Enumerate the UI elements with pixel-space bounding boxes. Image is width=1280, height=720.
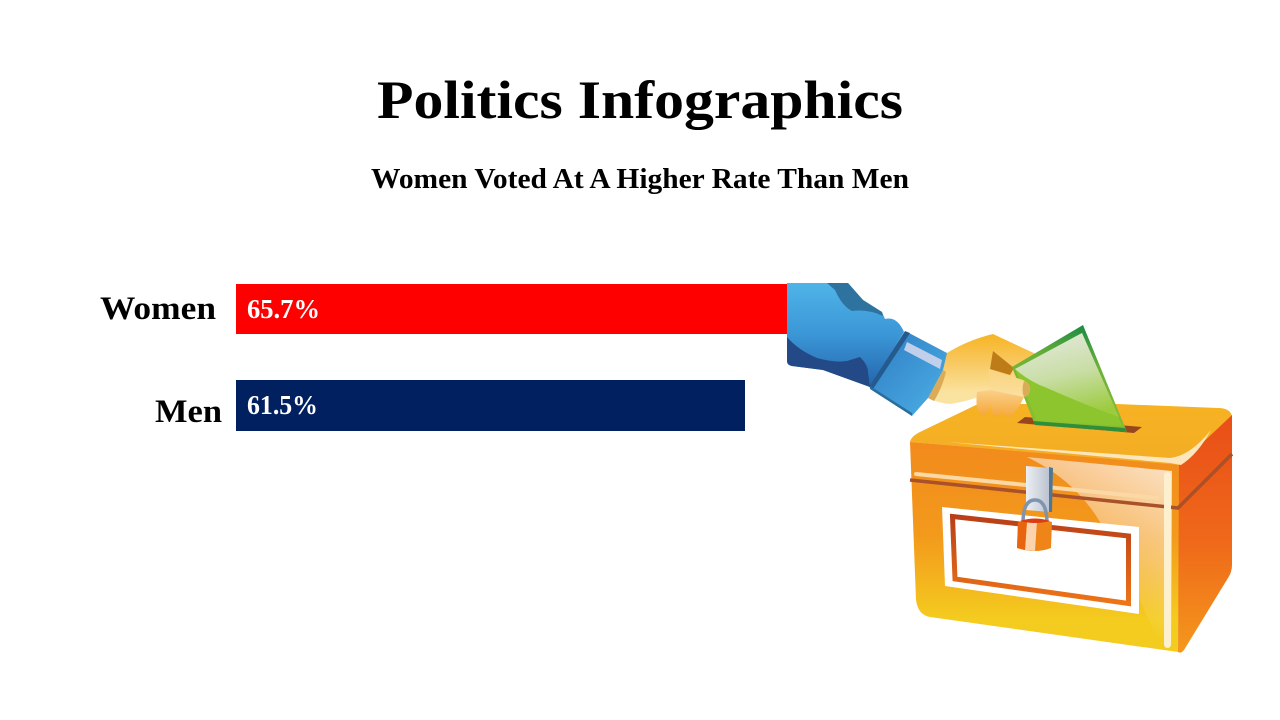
- icon: green ballot paper: [990, 325, 1127, 432]
- title: Politics Infographics: [377, 70, 903, 130]
- slot: [1017, 417, 1142, 433]
- bar chart: voting rate by gender: [100, 284, 788, 431]
- subtitle: Women Voted At A Higher Rate Than Men: [371, 164, 909, 195]
- lock body: [1017, 520, 1052, 551]
- strap highlight: [916, 474, 1157, 498]
- thumbnail: [1022, 381, 1030, 397]
- palm shadow: [990, 351, 1014, 375]
- paper green fill: [1015, 333, 1122, 426]
- value: women: 65.7%: [247, 294, 320, 324]
- strap line: [910, 454, 1232, 508]
- label: men: Men: [155, 394, 222, 430]
- box lid: [910, 404, 1232, 466]
- lid highlight: [947, 430, 1211, 465]
- paper edge: [1012, 325, 1127, 432]
- box front face: [910, 442, 1180, 652]
- vertical highlight: [1164, 472, 1171, 648]
- glass reflection: [1027, 457, 1172, 648]
- thumb: [988, 369, 1030, 397]
- label frame: [952, 516, 1128, 604]
- bar: men: [236, 380, 745, 431]
- padlock: [1017, 466, 1053, 551]
- paper bottom strip: [1033, 421, 1127, 432]
- shackle: [1023, 500, 1047, 524]
- icon: blue sleeve: [787, 283, 947, 416]
- sleeve lower fold: [787, 337, 870, 387]
- sleeve: [787, 283, 904, 387]
- box right face: [1178, 415, 1232, 653]
- cuff band: [904, 342, 942, 369]
- cuff edge: [870, 386, 912, 416]
- paper pale shine: [1015, 333, 1119, 417]
- white label: [942, 507, 1139, 614]
- icon: fingers and thumb: [976, 369, 1030, 417]
- finger one: [976, 390, 990, 415]
- value: men: 61.5%: [247, 390, 318, 420]
- bar: women: [236, 284, 788, 334]
- hasp plate: [1026, 466, 1050, 512]
- icon: palm of hand: [928, 334, 1040, 404]
- icon: ballot box: [910, 404, 1232, 653]
- cuff seam: [869, 331, 910, 389]
- label: women: Women: [100, 291, 216, 327]
- cuff: [870, 333, 947, 416]
- finger two: [990, 390, 1003, 416]
- sleeve upper fold: [827, 283, 883, 316]
- wrist shadow: [928, 370, 946, 401]
- finger three: [1002, 390, 1025, 417]
